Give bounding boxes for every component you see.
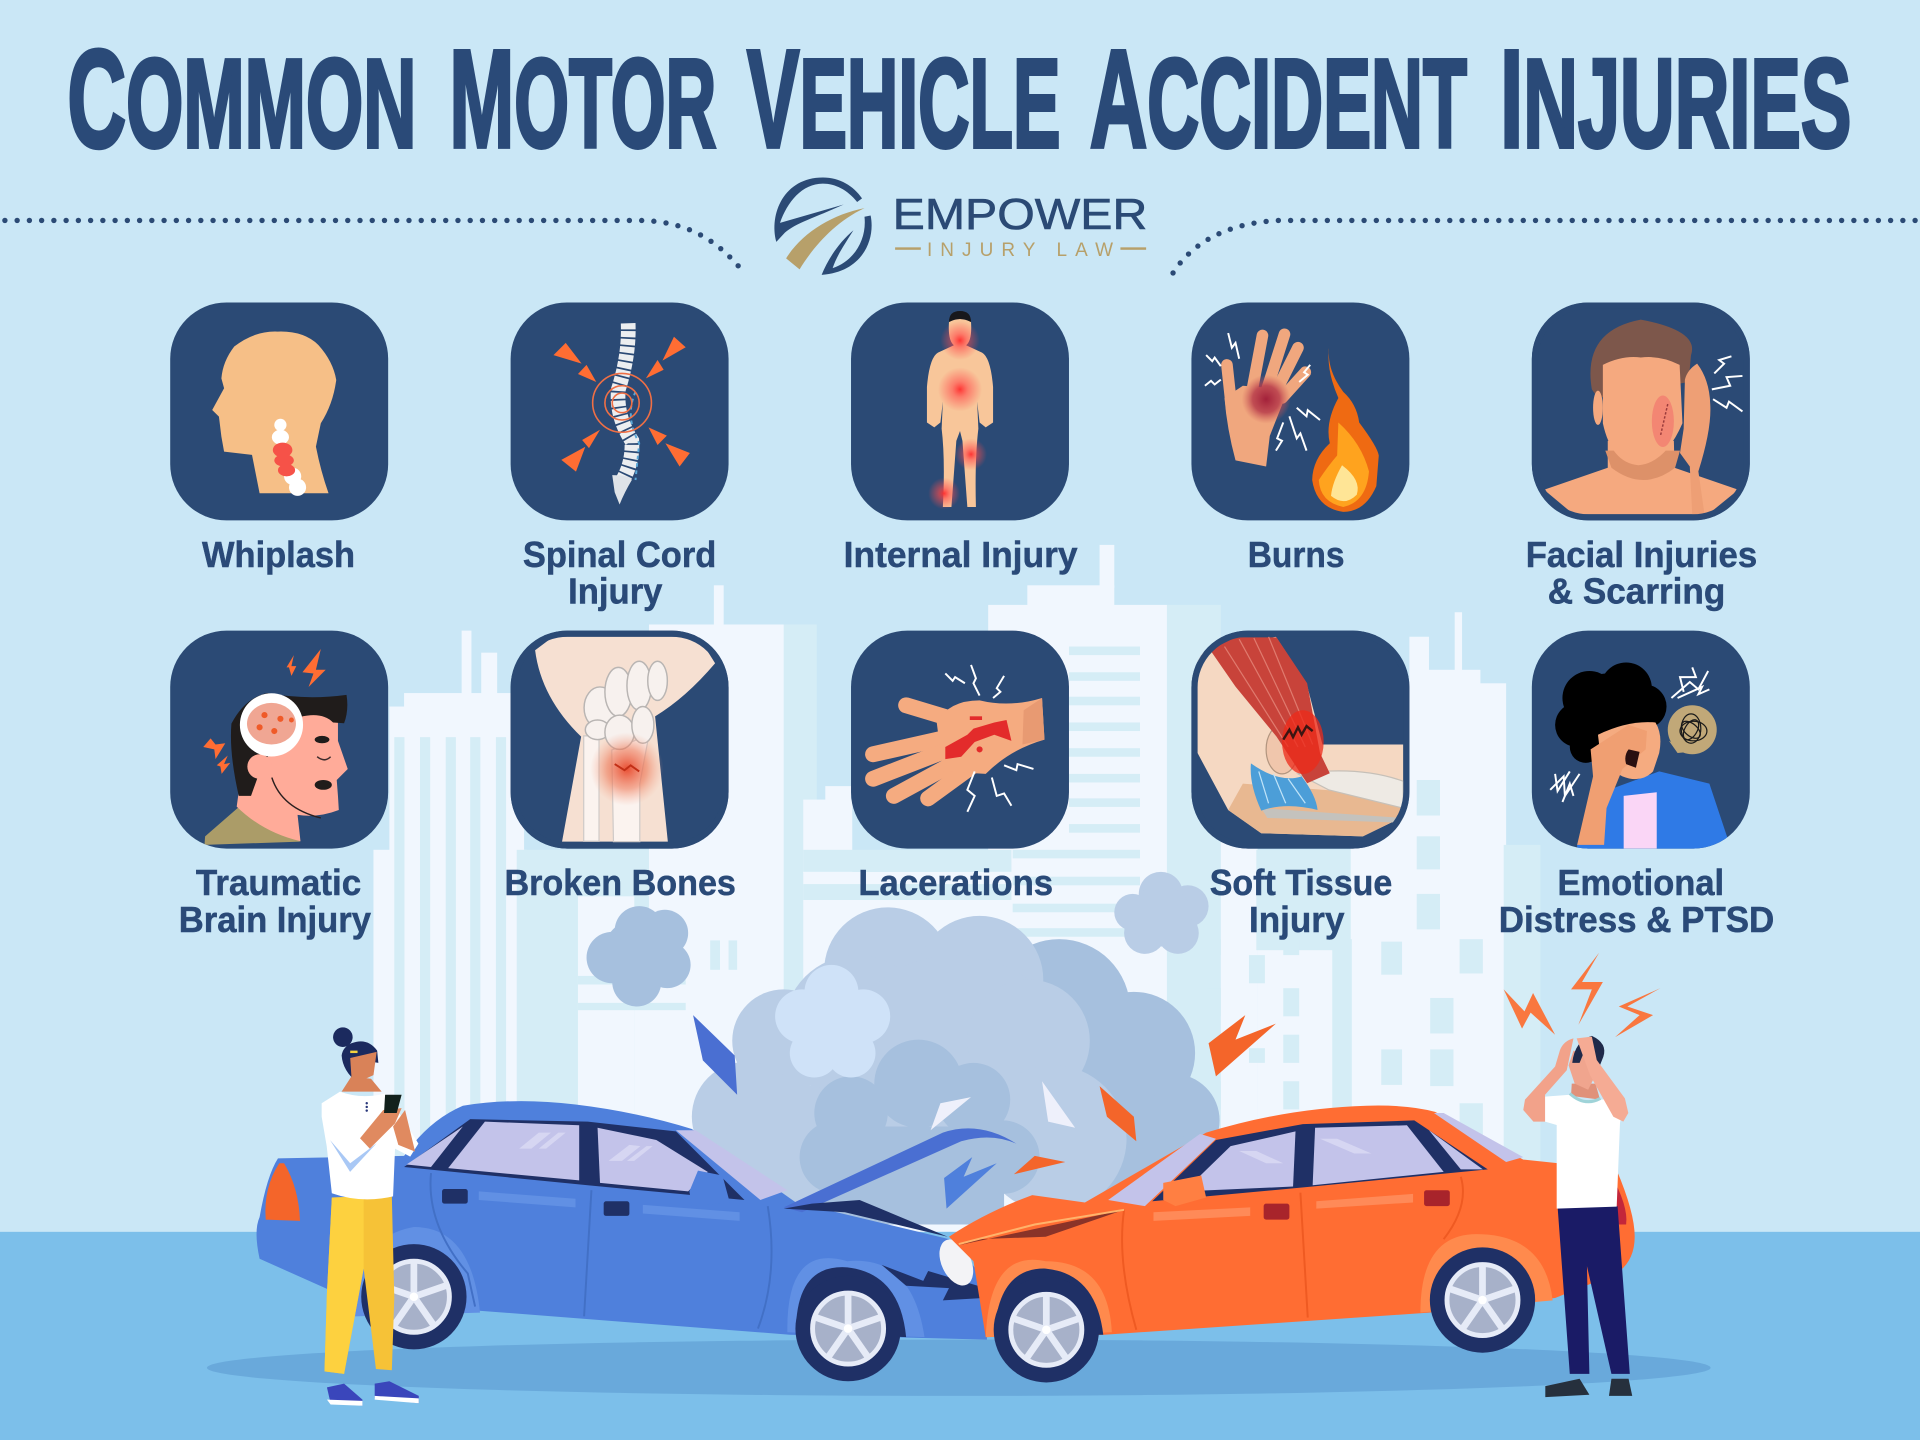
title: ACCIDENT [1090, 21, 1467, 177]
panel: spinal cord injury [511, 302, 729, 612]
label: Burns [1248, 534, 1344, 575]
label [1526, 534, 1757, 612]
panel: burns [1191, 302, 1409, 575]
logo: Empower Injury Law [775, 178, 1147, 275]
label: Soft Tissue [1210, 862, 1392, 903]
city skyline background [373, 545, 1540, 1232]
blue car [257, 1101, 1016, 1381]
title: VEHICLE [747, 21, 1060, 177]
label: Whiplash [202, 534, 355, 575]
panel: broken bones [504, 631, 736, 903]
panel: soft tissue injury [1191, 631, 1409, 940]
small smoke puff right [1114, 872, 1209, 954]
orange car [949, 1106, 1635, 1382]
panel: traumatic brain injury [170, 631, 388, 940]
label: Internal Injury [844, 534, 1078, 575]
label [179, 862, 371, 940]
icon: elbow muscle and ligament tear [1191, 631, 1409, 849]
label: Emotional [1558, 862, 1724, 903]
label: Facial Injuries [1526, 534, 1757, 575]
title [67, 21, 1851, 177]
label: Traumatic [196, 862, 361, 903]
label: Lacerations [858, 862, 1053, 903]
logo: Empower Injury Law: EMPOWER [893, 191, 1147, 239]
icon: human body with red pain spots [851, 302, 1069, 520]
icon: distressed person with scribble thought [1532, 631, 1750, 851]
label [1499, 862, 1774, 940]
label [523, 534, 716, 612]
panel: emotional distress and PTSD [1499, 631, 1774, 940]
panel: whiplash [170, 302, 388, 575]
main smoke cloud [692, 907, 1220, 1249]
title: MOTOR [449, 21, 716, 177]
small smoke puff left [587, 906, 691, 1007]
label: Spinal Cord [523, 534, 716, 575]
road [0, 1232, 1920, 1440]
label: Brain Injury [179, 899, 371, 940]
label: Injury [1249, 899, 1344, 940]
icon: face with scar and hand [1532, 302, 1750, 520]
panel: internal injury [844, 302, 1078, 575]
woman with phone [322, 1027, 419, 1406]
icon: burned hand and flame [1191, 302, 1409, 520]
icon: fractured wrist x-ray [511, 631, 729, 849]
logo: Empower Injury Law: INJURY LAW [927, 240, 1113, 261]
label: Distress & PTSD [1499, 899, 1774, 940]
label: & Scarring [1548, 571, 1725, 612]
man holding head [1523, 1036, 1632, 1397]
panel: facial injuries and scarring [1526, 302, 1757, 612]
icon: whiplash head and neck [170, 302, 388, 520]
label: Broken Bones [504, 862, 736, 903]
icon: spine with pain markers [511, 302, 729, 520]
label [1210, 862, 1392, 940]
icon: cut hand with pain bolts [851, 631, 1069, 849]
panel: lacerations [851, 631, 1069, 903]
ground shadow [207, 1340, 1711, 1396]
label: Injury [568, 571, 662, 612]
title: COMMON [67, 21, 416, 177]
flying debris [693, 1015, 1276, 1209]
stress lightning bolts [1504, 953, 1660, 1037]
icon: head with glowing brain [170, 631, 388, 849]
